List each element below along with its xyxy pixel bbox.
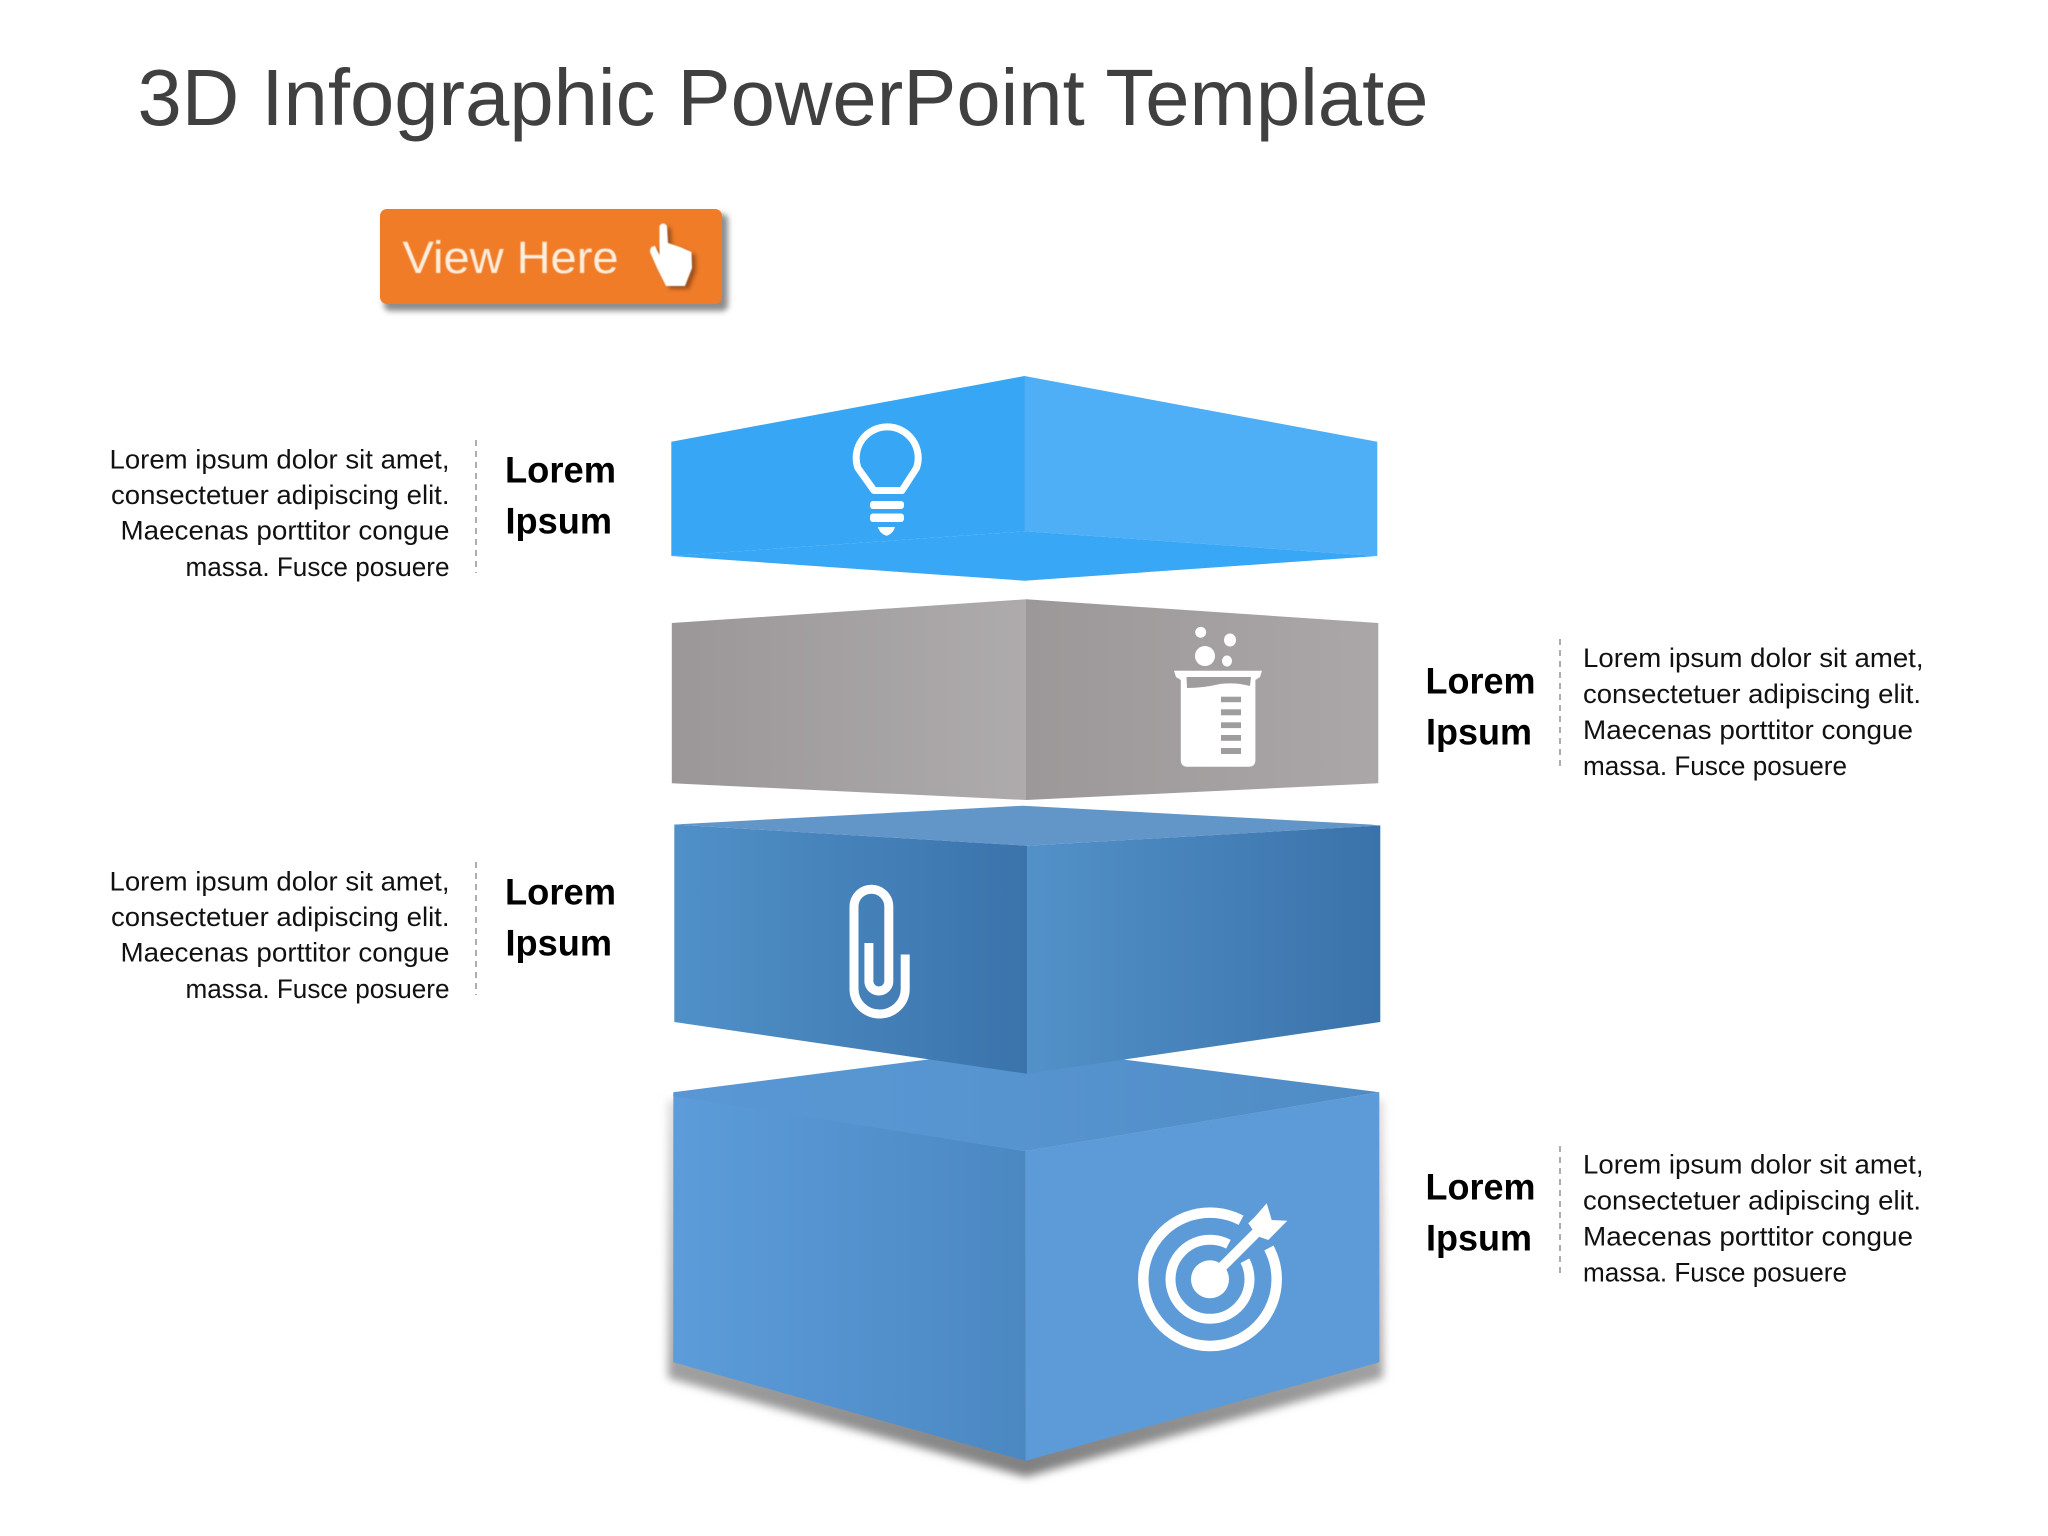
heading: Lorem — [505, 449, 616, 490]
heading: Ipsum — [1426, 712, 1532, 752]
heading: Ipsum — [1426, 1218, 1532, 1259]
heading — [1426, 1167, 1536, 1259]
icon: beaker — [1174, 627, 1262, 767]
body text: massa. Fusce posuere — [1583, 1258, 1847, 1288]
body text: Lorem ipsum dolor sit amet, — [1583, 1150, 1924, 1180]
layer 1: bright blue box — [671, 376, 1377, 581]
icon: target with arrow — [1143, 1189, 1299, 1346]
block: third left text — [110, 862, 616, 1004]
icon: pointing hand — [650, 224, 696, 289]
button: view here — [380, 209, 728, 311]
heading — [505, 449, 616, 541]
layer 4: base box — [668, 1047, 1383, 1477]
body text: consectetuer adipiscing elit. — [1583, 679, 1921, 709]
heading: Ipsum — [506, 500, 612, 541]
drop shadow — [668, 1100, 1383, 1477]
body text: massa. Fusce posuere — [186, 974, 450, 1004]
body text: Lorem ipsum dolor sit amet, — [1583, 643, 1924, 673]
body text: consectetuer adipiscing elit. — [1583, 1186, 1921, 1216]
body text: Lorem ipsum dolor sit amet, — [110, 866, 450, 896]
body text: Maecenas porttitor congue — [120, 938, 450, 968]
heading: Lorem — [1426, 1167, 1536, 1208]
body text: consectetuer adipiscing elit. — [111, 480, 450, 510]
layer 3: steel blue box — [674, 806, 1380, 1074]
heading — [1426, 660, 1536, 752]
button label: View Here — [402, 232, 618, 283]
body text: Maecenas porttitor congue — [1583, 715, 1913, 745]
body text — [1583, 1150, 1924, 1288]
layer 2: gray box — [672, 599, 1378, 800]
body text: massa. Fusce posuere — [1583, 751, 1847, 781]
title: 3D Infographic PowerPoint Template — [138, 53, 1428, 142]
body text — [1583, 643, 1924, 781]
body text: Lorem ipsum dolor sit amet, — [110, 444, 450, 474]
icon: light bulb — [856, 427, 918, 536]
body text — [110, 866, 450, 1004]
heading: Ipsum — [506, 922, 612, 963]
body text: Maecenas porttitor congue — [1583, 1222, 1913, 1252]
heading — [505, 871, 616, 963]
block: fourth right text — [1426, 1146, 1924, 1288]
body text: consectetuer adipiscing elit. — [111, 902, 450, 932]
body text — [110, 444, 450, 582]
block: second right text — [1426, 639, 1924, 781]
body text: massa. Fusce posuere — [186, 552, 450, 582]
body text: Maecenas porttitor congue — [120, 516, 450, 546]
heading: Lorem — [1426, 660, 1536, 702]
icon: paperclip — [854, 889, 905, 1014]
heading: Lorem — [505, 871, 616, 912]
block: top left text — [110, 440, 616, 582]
